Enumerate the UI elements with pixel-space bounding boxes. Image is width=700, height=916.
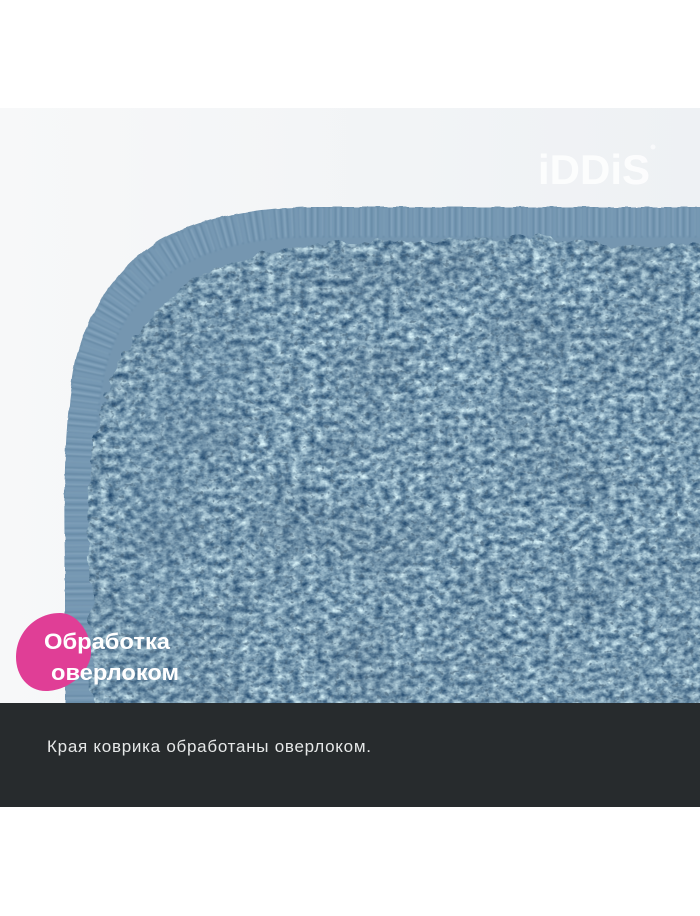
- pink blob badge: [16, 613, 91, 691]
- dark caption band: [0, 703, 700, 807]
- infographic canvas: [0, 108, 700, 807]
- mat pile texture: [86, 234, 700, 703]
- badge heading: [44, 629, 179, 685]
- IDDIS logo: [538, 144, 656, 193]
- heading line 1: Обработка: [44, 629, 171, 654]
- caption text: Края коврика обработаны оверлоком.: [47, 737, 371, 756]
- photo: blue bath mat: [50, 200, 700, 703]
- photo background: [0, 108, 700, 703]
- heading line 2: оверлоком: [51, 660, 179, 685]
- mat dark specks: [86, 234, 700, 703]
- logo trademark dot: [650, 144, 656, 150]
- mat shading patches: [90, 240, 700, 703]
- overlock edge binding: [79, 222, 700, 703]
- mat base colour: [50, 200, 700, 703]
- darker left shading: [120, 310, 280, 703]
- logo wordmark: iDDiS: [538, 146, 650, 193]
